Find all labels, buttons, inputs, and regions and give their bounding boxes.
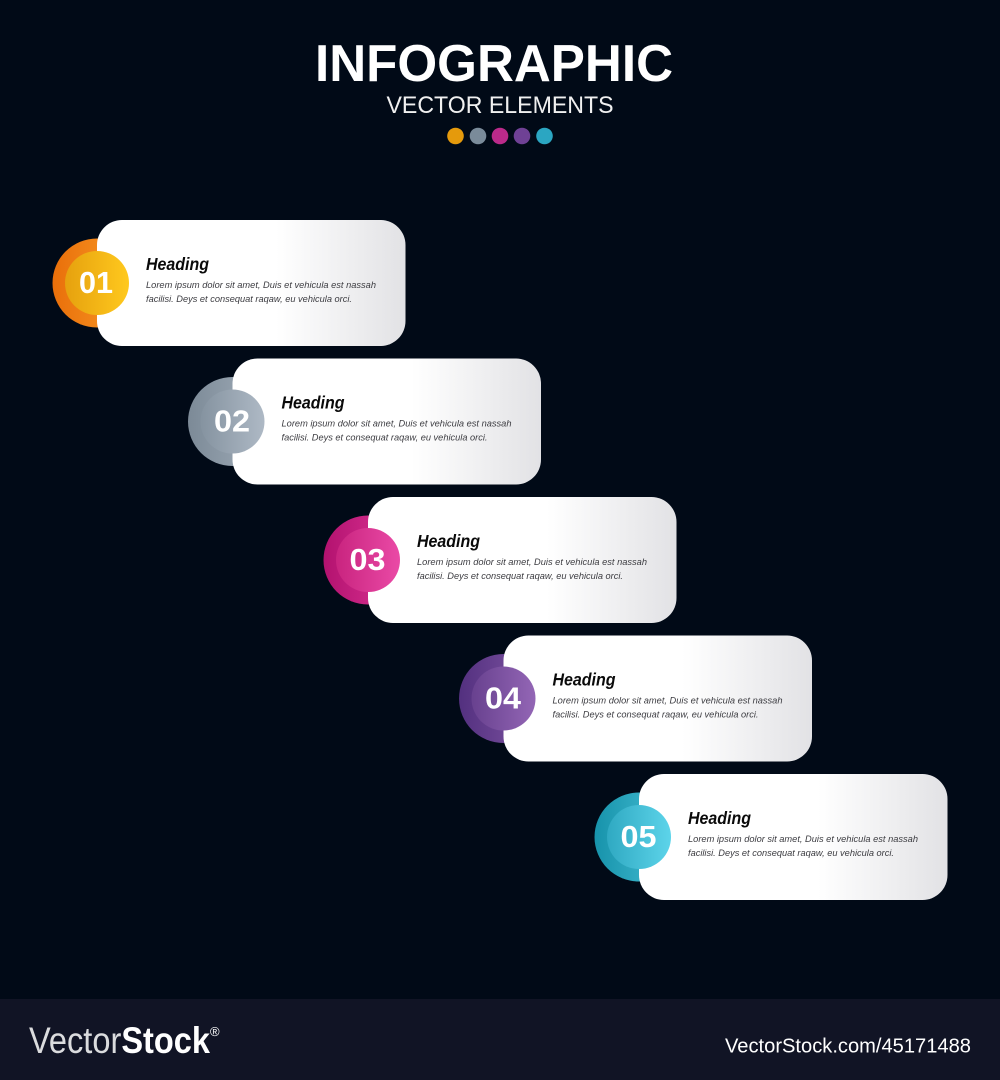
badge 02: [200, 390, 264, 454]
panel: card 02: [232, 358, 541, 484]
footer logo: ®: [210, 1024, 220, 1039]
icon: number badge 03 outer ring: [324, 516, 412, 604]
text block 04: facilisi. Deys et consequat raqaw, eu vehicula orci.: [552, 710, 758, 720]
panel: card 04: [504, 636, 812, 762]
step 04: [459, 636, 812, 762]
badge 05: [607, 805, 671, 869]
text block 03: Lorem ipsum dolor sit amet, Duis et vehicula est nassah: [417, 557, 647, 568]
icon: number badge 01 outer ring: [52, 238, 142, 328]
badge 03: 03: [350, 542, 386, 577]
footer logo: VectorStock: [29, 1020, 210, 1061]
heading 04: Heading: [552, 670, 616, 690]
text block 03: facilisi. Deys et consequat raqaw, eu vehicula orci.: [417, 571, 623, 582]
heading 02: Heading: [282, 392, 345, 412]
heading 05: Heading: [688, 808, 751, 828]
text block 02: Lorem ipsum dolor sit amet, Duis et vehicula est nassah: [282, 418, 512, 430]
heading 01: Heading: [146, 254, 209, 274]
text block 01: facilisi. Deys et consequat raqaw, eu vehicula orci.: [146, 294, 352, 305]
badge 03: [336, 528, 400, 592]
subtitle: VECTOR ELEMENTS: [386, 92, 614, 119]
badge 01: 01: [79, 265, 113, 300]
text block 04: Lorem ipsum dolor sit amet, Duis et vehicula est nassah: [552, 696, 782, 706]
step 01: [52, 220, 406, 346]
colour dots: [447, 128, 553, 144]
text block 03: [417, 557, 647, 582]
panel: card 01: [97, 220, 406, 346]
text block 02: [282, 418, 512, 444]
footer bar: [0, 999, 1000, 1080]
step 05: [594, 774, 948, 900]
text block 04: [552, 696, 782, 720]
text block 05: Lorem ipsum dolor sit amet, Duis et vehicula est nassah: [688, 834, 918, 845]
text block 01: Lorem ipsum dolor sit amet, Duis et vehicula est nassah: [146, 280, 376, 291]
badge 04: 04: [485, 680, 522, 716]
icon: number badge 02 outer ring: [188, 377, 277, 466]
text block 05: facilisi. Deys et consequat raqaw, eu vehicula orci.: [688, 848, 894, 859]
step 02: [188, 358, 541, 484]
text block 01: [146, 280, 376, 305]
footer id: VectorStock.com/45171488: [725, 1036, 971, 1058]
text block 05: [688, 834, 918, 859]
panel: card 05: [639, 774, 948, 900]
badge 05: 05: [620, 819, 656, 854]
icon: number badge 05 outer ring: [594, 792, 684, 882]
icon: number badge 04 outer ring: [459, 654, 548, 743]
step 03: [324, 497, 676, 623]
text block 02: facilisi. Deys et consequat raqaw, eu vehicula orci.: [282, 432, 488, 444]
title: INFOGRAPHIC: [315, 35, 673, 93]
badge 02: 02: [214, 404, 250, 438]
badge 04: [472, 666, 536, 730]
badge 01: [65, 251, 129, 315]
heading 03: Heading: [417, 531, 480, 551]
panel: card 03: [368, 497, 676, 623]
